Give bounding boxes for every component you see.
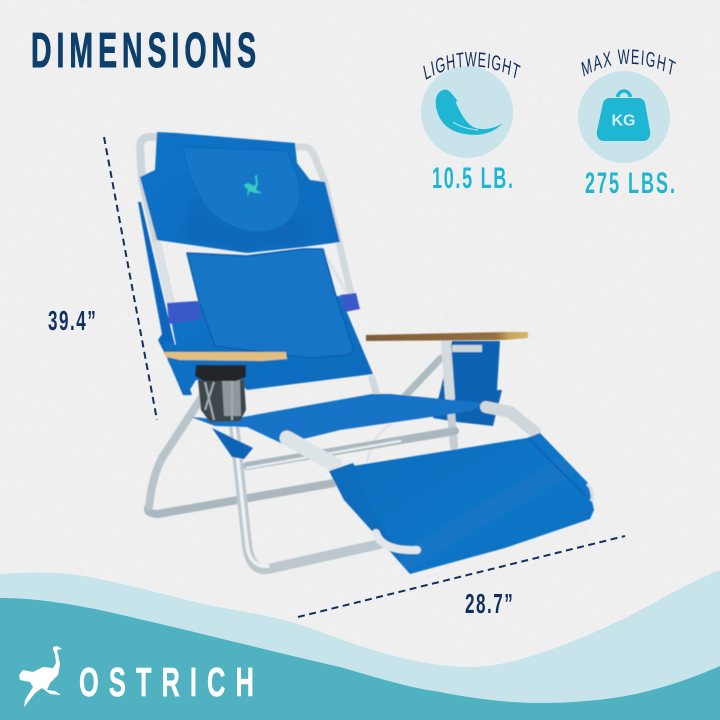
lightweight curved heading: LIGHTWEIGHT bbox=[423, 52, 521, 80]
rear frame bbox=[148, 343, 482, 569]
lower back fabric bbox=[164, 296, 373, 396]
icon: embroidered ostrich bbox=[244, 175, 262, 197]
elastic straps bbox=[167, 293, 360, 324]
lightweight value: 10.5 LB. bbox=[432, 163, 513, 195]
dark wave bbox=[0, 598, 720, 720]
flap shadow bbox=[185, 195, 305, 248]
panel: lightweight bbox=[421, 52, 521, 195]
height dimension line bbox=[104, 137, 157, 420]
icon: feather bbox=[436, 90, 503, 135]
max weight value: 275 LBS. bbox=[585, 168, 675, 200]
max weight curved heading: MAX WEIGHT bbox=[581, 49, 676, 76]
right armrest bbox=[366, 332, 528, 341]
width dimension line bbox=[298, 536, 625, 617]
pocket flap bbox=[183, 147, 300, 232]
left armrest bbox=[163, 352, 287, 361]
lightweight circle bbox=[421, 66, 513, 158]
max weight circle bbox=[578, 71, 670, 163]
rear pouch bbox=[433, 341, 502, 426]
light wave bbox=[0, 570, 720, 720]
hinges bbox=[287, 407, 535, 465]
height label: 39.4” bbox=[48, 305, 96, 336]
width label: 28.7” bbox=[465, 588, 513, 619]
upper back fabric bbox=[140, 132, 340, 253]
upper frame bbox=[140, 137, 352, 325]
footrest bbox=[329, 433, 594, 574]
side strap bbox=[138, 202, 192, 395]
pillow bbox=[187, 249, 353, 358]
chair photo bbox=[138, 132, 594, 574]
cup holder bbox=[195, 365, 246, 422]
brand logo bbox=[19, 646, 254, 707]
icon: kettlebell weight: KG bbox=[612, 112, 636, 130]
panel: max weight bbox=[578, 49, 676, 200]
brand name: OSTRICH bbox=[79, 660, 254, 706]
title: DIMENSIONS bbox=[31, 24, 256, 78]
icon: kettlebell weight bbox=[597, 91, 650, 141]
seat fabric bbox=[191, 394, 484, 459]
icon: ostrich silhouette bbox=[19, 646, 62, 707]
